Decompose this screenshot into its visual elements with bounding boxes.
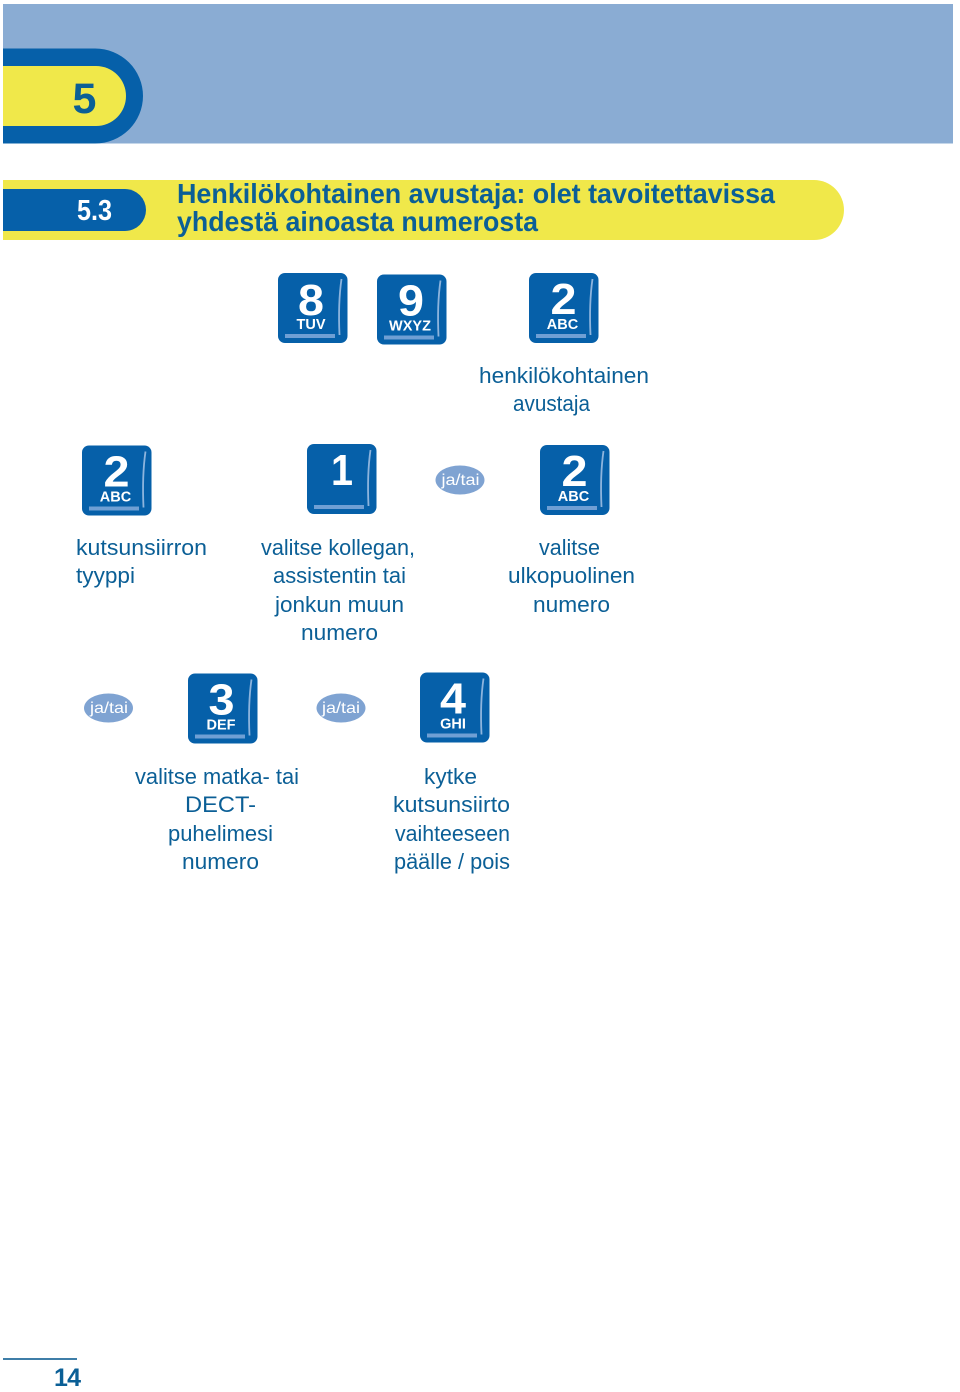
key 4 GHI: GHI: [440, 716, 466, 732]
badge: ja/tai: ja/tai: [321, 700, 360, 717]
label: valitse kollegan: numero: [301, 620, 378, 645]
section number: 5.3: [77, 195, 112, 227]
label: kutsunsiirron tyyppi: kutsunsiirron: [76, 535, 207, 560]
section title: [177, 178, 775, 237]
label: kytke kutsunsiirto vaihteeseen päälle / pois: päälle / pois: [394, 849, 510, 874]
label: valitse matka- tai DECT-puhelimesi numero: DECT-: [185, 792, 256, 817]
label: henkilökohtainen avustaja: henkilökohtainen: [479, 363, 649, 388]
label: valitse ulkopuolinen numero: valitse: [539, 535, 600, 560]
page number: 14: [54, 1364, 81, 1392]
key 3 DEF: DEF: [206, 718, 236, 734]
chapter header band: [3, 4, 953, 144]
section heading bar: [3, 178, 844, 240]
label: kytke kutsunsiirto vaihteeseen päälle / pois: kutsunsiirto: [393, 792, 510, 817]
key 2 ABC: external number: [540, 445, 610, 515]
key 2 ABC: external number: 2: [562, 447, 588, 496]
key 2 ABC: call transfer type: [82, 446, 152, 516]
key 8 TUV: TUV: [296, 317, 326, 333]
key 9 WXYZ: [377, 274, 446, 344]
key 4 GHI: [420, 672, 490, 742]
label: valitse ulkopuolinen numero: ulkopuolinen: [508, 563, 635, 588]
key 1: 1: [331, 446, 353, 495]
label: valitse matka- tai DECT-puhelimesi numero: valitse matka- tai: [135, 764, 299, 789]
section number: [3, 189, 146, 231]
key 3 DEF: [188, 674, 258, 744]
label: valitse kollegan: assistentin tai: [273, 563, 406, 588]
label: valitse ulkopuolinen numero: numero: [533, 592, 610, 617]
badge: ja/tai: ja/tai: [89, 700, 128, 717]
page number: [3, 1358, 81, 1392]
label: valitse matka- tai DECT-puhelimesi numero: puhelimesi: [168, 821, 273, 846]
key 1: [307, 444, 376, 514]
key 2 ABC: call transfer type: 2: [104, 448, 130, 496]
label: henkilökohtainen avustaja: [479, 363, 649, 416]
label: valitse kollegan: jonkun muun: [274, 592, 404, 617]
label: valitse ulkopuolinen numero: [508, 535, 635, 617]
chapter number tab: [3, 48, 143, 144]
key 8 TUV: 8: [298, 276, 324, 325]
section title: Henkilökohtainen avustaja: olet tavoitettavissa: [177, 178, 775, 209]
label: kutsunsiirron tyyppi: tyyppi: [76, 563, 135, 588]
label: kytke kutsunsiirto vaihteeseen päälle / pois: kytke: [424, 764, 477, 789]
key 2 ABC: personal assistant: [529, 273, 598, 343]
label: valitse kollegan: [261, 535, 415, 645]
label: henkilökohtainen avustaja: avustaja: [513, 391, 591, 416]
badge: ja/tai: ja/tai: [440, 472, 480, 489]
badge: ja/tai: [84, 694, 133, 722]
label: valitse kollegan: valitse kollegan,: [261, 535, 415, 560]
key 2 ABC: personal assistant: 2: [550, 275, 576, 324]
key 2 ABC: call transfer type: ABC: [100, 490, 132, 506]
section title: yhdestä ainoasta numerosta: [177, 206, 538, 237]
label: kytke kutsunsiirto vaihteeseen päälle / pois: [393, 764, 510, 874]
key 3 DEF: 3: [208, 676, 234, 724]
key 4 GHI: 4: [440, 674, 467, 724]
key 8 TUV: [278, 273, 348, 343]
key 9 WXYZ: WXYZ: [389, 318, 431, 334]
badge: ja/tai: [316, 694, 366, 722]
chapter number tab: 5: [73, 75, 96, 123]
key 9 WXYZ: 9: [398, 276, 424, 326]
key 2 ABC: external number: ABC: [558, 489, 590, 505]
key 2 ABC: personal assistant: ABC: [547, 317, 579, 333]
label: valitse matka- tai DECT-puhelimesi numero: numero: [182, 849, 259, 874]
badge: ja/tai: [436, 466, 484, 494]
label: valitse matka- tai DECT-puhelimesi numero: [135, 764, 299, 874]
label: kytke kutsunsiirto vaihteeseen päälle / pois: vaihteeseen: [395, 821, 510, 846]
label: kutsunsiirron tyyppi: [76, 535, 207, 588]
